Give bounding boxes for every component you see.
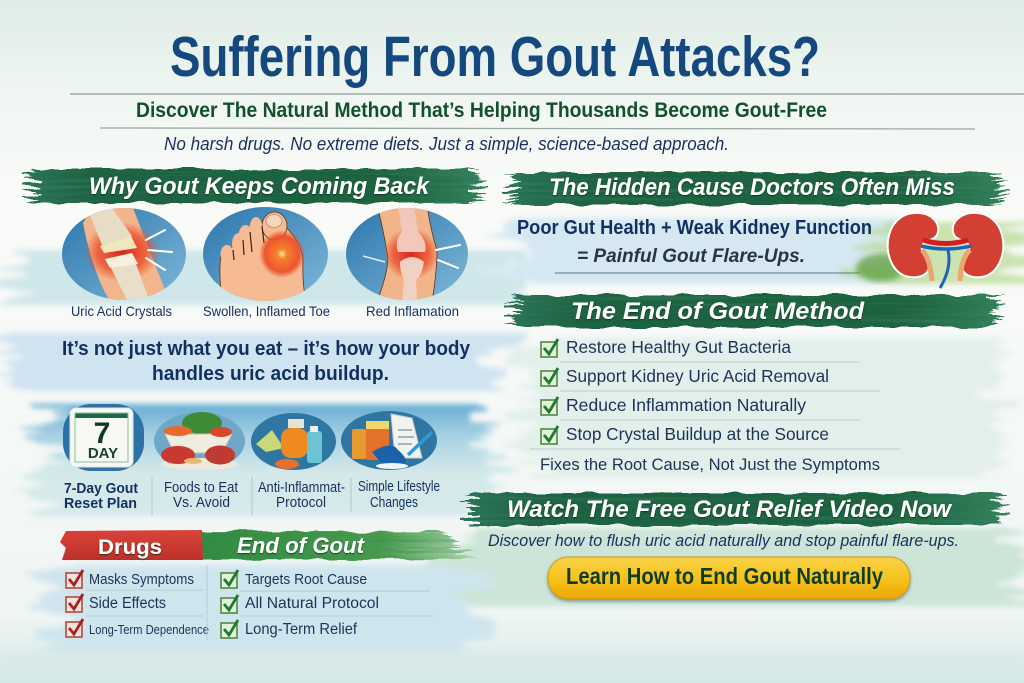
icon: lifestyle changes [341, 411, 437, 470]
icon: 7 day calendar [63, 404, 144, 471]
list: drug drawbacks: Side Effects [89, 595, 166, 612]
lower divider [100, 128, 975, 129]
icon: anti-inflammatory protocol [251, 413, 336, 470]
icon: swollen toe [203, 207, 328, 304]
callout: uric acid statement: handles uric acid buildup. [152, 363, 389, 385]
checklist item: inflammation: Reduce Inflammation Naturally [566, 395, 806, 415]
label: anti-inflammatory protocol: Anti-Inflammat- [258, 479, 345, 496]
label: 7-day reset plan: 7-Day Gout [64, 480, 138, 497]
panel: drugs vs end of gout [60, 530, 470, 640]
heading banner: why gout: Why Gout Keeps Coming Back [89, 173, 431, 200]
label: foods to eat: Foods to Eat [164, 479, 239, 496]
callout: uric acid statement: It’s not just what you eat – it’s how your body [62, 338, 471, 360]
panel: program components [35, 404, 495, 516]
icon: uric acid crystals [62, 208, 186, 302]
top divider [70, 93, 1024, 94]
text: poor gut health: = Painful Gout Flare-Ups. [577, 246, 805, 267]
button: learn how: Learn How to End Gout Naturally [566, 563, 883, 589]
label: foods to eat: Vs. Avoid [173, 494, 230, 511]
list: end of gout benefits: All Natural Protocol [245, 595, 379, 612]
heading banner: method [514, 295, 996, 327]
list: drug drawbacks [66, 570, 209, 637]
icon: kidneys [856, 213, 1003, 288]
checklist item: gut bacteria: Restore Healthy Gut Bacteria [566, 337, 791, 357]
heading banner: why gout [32, 169, 478, 203]
text: root cause: Fixes the Root Cause, Not Just the Symptoms [540, 455, 880, 474]
icon: 7 day calendar: 7 [94, 417, 110, 450]
list: drug drawbacks: Masks Symptoms [89, 571, 194, 588]
label: 7-day reset plan: Reset Plan [64, 495, 137, 512]
heading: drugs: Drugs [98, 536, 162, 559]
icon: 7 day calendar: DAY [88, 445, 118, 462]
callout: uric acid statement [62, 338, 471, 385]
text: poor gut health [517, 217, 872, 267]
list: end of gout benefits: Targets Root Cause [245, 571, 367, 588]
label: simple lifestyle changes: Simple Lifestyle [358, 478, 440, 495]
label: simple lifestyle changes [358, 478, 440, 511]
label: simple lifestyle changes: Changes [370, 494, 418, 511]
text: discover: Discover how to flush uric acid naturally and stop painful flare-ups. [488, 532, 959, 550]
caption: red inflammation: Red Inflamation [366, 303, 459, 319]
caption: uric acid crystals: Uric Acid Crystals [71, 303, 172, 319]
label: 7-day reset plan [64, 480, 138, 512]
caption: swollen toe: Swollen, Inflamed Toe [203, 303, 330, 319]
subtitle: Discover The Natural Method That’s Helping Thousands Become Gout-Free [136, 99, 827, 122]
checklist item: kidney: Support Kidney Uric Acid Removal [566, 366, 829, 386]
title: Suffering From Gout Attacks? [170, 25, 820, 89]
panel: end of gout method [514, 295, 996, 474]
heading banner: video: Watch The Free Gout Relief Video Now [507, 496, 952, 523]
heading banner: method: The End of Gout Method [571, 298, 865, 325]
panel wash [35, 404, 495, 516]
heading: end of gout: End of Gout [237, 533, 366, 558]
list: end of gout benefits [221, 570, 379, 638]
panel: why gout keeps coming back [32, 169, 478, 385]
label: foods to eat [164, 479, 239, 511]
heading: drugs [60, 530, 203, 560]
list: drug drawbacks: Long-Term Dependence [89, 622, 209, 637]
button: learn how [548, 557, 910, 599]
icon: foods bowl [154, 412, 245, 470]
text: poor gut health: Poor Gut Health + Weak Kidney Function [517, 217, 872, 239]
heading: end of gout [190, 531, 470, 560]
panel: call to action [470, 493, 1000, 599]
heading banner: hidden cause: The Hidden Cause Doctors Often Miss [549, 174, 955, 201]
icon: red inflammation knee [346, 205, 468, 302]
tagline: No harsh drugs. No extreme diets. Just a simple, science-based approach. [164, 134, 729, 154]
checklist item: crystal: Stop Crystal Buildup at the Source [566, 424, 829, 444]
list: end of gout benefits: Long-Term Relief [245, 621, 358, 638]
label: anti-inflammatory protocol: Protocol [276, 494, 326, 511]
label: anti-inflammatory protocol [258, 479, 345, 511]
panel: hidden cause [512, 172, 1003, 288]
